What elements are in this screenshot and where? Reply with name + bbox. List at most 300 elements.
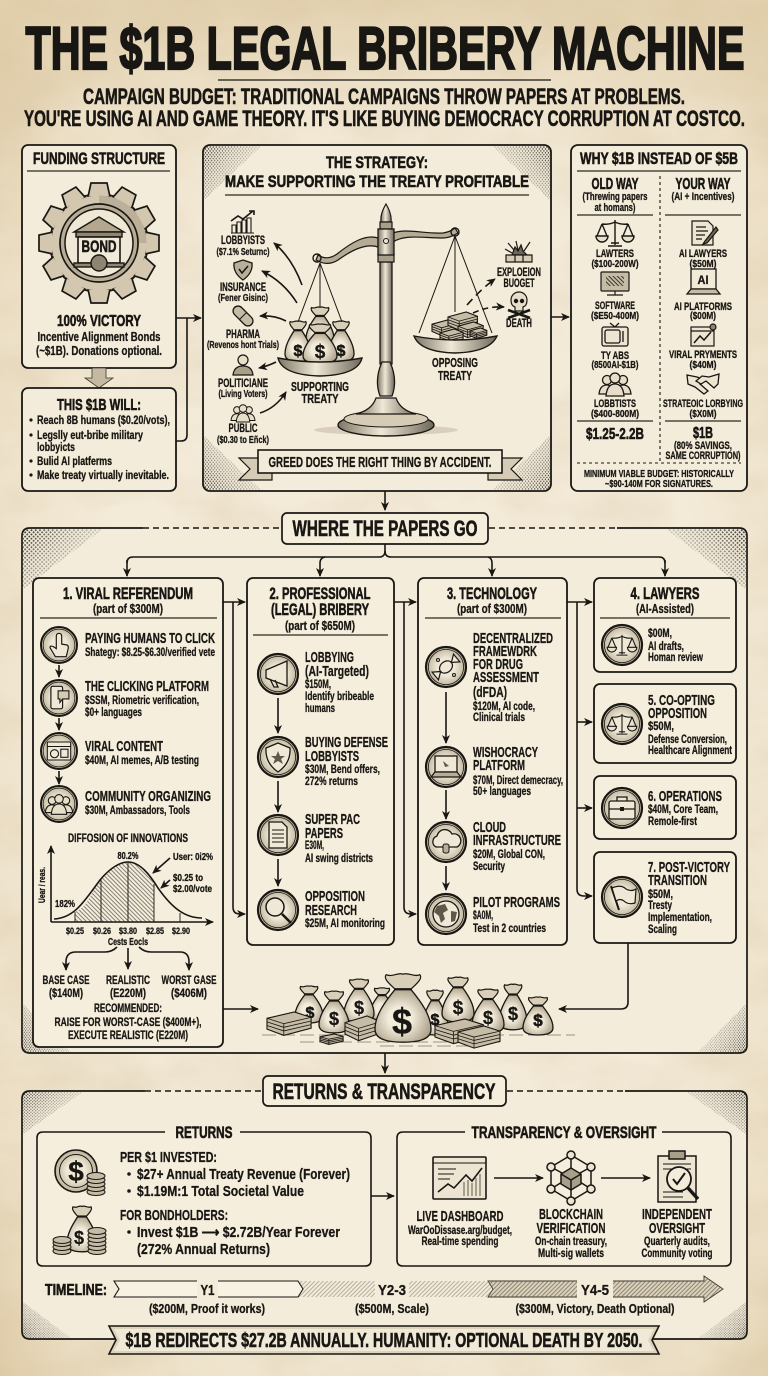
item: lobbying: (AI-Targeted)	[305, 664, 369, 680]
panel: 7 post-victory transition: Scaling	[648, 922, 677, 936]
panel: 6 operations: $40M, Core Team,	[648, 802, 718, 816]
label: live dashboard	[408, 1209, 512, 1248]
timeline: Y4-5	[581, 1282, 609, 1299]
text: for bondholders	[120, 1208, 340, 1258]
panel: 7 post-victory transition: 7. POST-VICTORY	[648, 860, 730, 876]
illustration: money pile: $	[508, 1004, 518, 1024]
heading: returns: RETURNS	[176, 1123, 232, 1142]
text: victory	[36, 313, 162, 358]
panel: 5 co-opting opposition: 5. CO-OPTING	[648, 693, 715, 709]
panel: 7 post-victory transition: Implementation,	[648, 910, 712, 924]
item: pilot programs: PILOT PROGRAMS	[473, 895, 560, 911]
label: pharma: PHARMA	[226, 329, 260, 341]
icon: pointer hand	[41, 627, 77, 663]
item: super pac	[305, 812, 373, 865]
icon: globe	[426, 894, 466, 934]
heading: strategy	[225, 153, 529, 195]
arrow: strategy to where the papers go	[384, 491, 386, 510]
item: dfda: (dFDA)	[473, 685, 507, 701]
illustration: money pile: $	[329, 1009, 339, 1029]
icon: megaphone	[258, 654, 298, 694]
label: explosion budget: BUOGET	[504, 276, 535, 290]
text: per $1 invested: $1.19M:1 Total Societal Value	[137, 1183, 304, 1200]
arrows: into money pile	[223, 943, 628, 1009]
column: old way: OLD WAY	[592, 176, 639, 193]
panel: the strategy	[203, 145, 551, 491]
label: lobbyists: ($7.1% Seturnc)	[216, 247, 270, 258]
icon: bags on supporting pan	[278, 307, 362, 376]
item: wishocracy: PLATFORM	[473, 758, 525, 774]
label: blockchain verification: VERIFICATION	[536, 1221, 606, 1237]
scenarios: ($406M)	[171, 986, 207, 1000]
scenarios: ($140M)	[49, 986, 83, 1000]
icon: shield	[258, 737, 298, 777]
item: super pac: E30M,	[305, 838, 324, 852]
arrow: column 3 to side boxes	[567, 602, 592, 896]
arrow: returns to transparency	[371, 1195, 394, 1197]
chart: diffusion of innovations	[37, 833, 213, 948]
icon: AI laptop: AI	[698, 273, 708, 287]
panel: 3 technology	[418, 578, 567, 945]
panel: 4 lawyers: AI drafts,	[648, 639, 684, 653]
text: victory: (~$1B). Donations optional.	[36, 343, 162, 358]
icon: clipboard audit	[658, 1151, 698, 1202]
item: community organizing: COMMUNITY ORGANIZING	[85, 789, 211, 805]
item: buying defense lobbyists	[305, 735, 388, 788]
heading: (LEGAL) BRIBERY	[271, 600, 369, 619]
panel: 4 lawyers: 4. LAWYERS	[630, 584, 700, 603]
label: independent oversight: INDEPENDENT	[642, 1207, 712, 1223]
illustration: money pile: $	[306, 1005, 315, 1022]
heading: 3. TECHNOLOGY	[447, 584, 537, 603]
column: old way: ($400-800M)	[591, 408, 639, 420]
text: for bondholders: FOR BONDHOLDERS:	[120, 1208, 228, 1224]
icon: dashboard	[433, 1157, 486, 1199]
item: clicking platform: $0+ languages	[85, 705, 142, 719]
icon: gear bond	[39, 183, 159, 303]
item: dfda: Clinical trials	[473, 710, 525, 724]
arrows: branch to columns	[127, 544, 665, 576]
recommendation	[54, 1001, 202, 1042]
item: dfda: FOR DRUG	[473, 657, 523, 673]
item: wishocracy: $70M, Direct demecracy,	[473, 773, 563, 787]
icon: cloud	[426, 822, 466, 862]
icon: flag	[602, 877, 642, 917]
label: pharma: (Revenos hont Trials)	[207, 340, 279, 351]
chart: diffusion of innovations: 80.2%	[118, 851, 139, 862]
scenarios	[42, 973, 216, 1000]
heading: strategy: THE STRATEGY:	[326, 153, 428, 172]
timeline	[45, 1276, 723, 1316]
item: lobbying: LOBBYING	[305, 650, 354, 666]
item: paying humans: PAYING HUMANS TO CLICK	[85, 631, 215, 647]
panel: 4 lawyers: (AI-Assisted)	[636, 601, 694, 616]
bullet list: lobbyicts	[37, 440, 75, 454]
icon: money bag and coins	[53, 1206, 106, 1254]
arrow: strategy to why	[551, 316, 569, 318]
column: your way: ($50M)	[690, 258, 716, 270]
column: old way: $1.25-2.2B	[586, 426, 644, 443]
item: lobbying: $150M,	[305, 677, 331, 691]
icon: coin and stack: $	[68, 1156, 84, 1187]
bullet list: Make treaty virtually inevitable.	[37, 468, 169, 482]
label: death: DEATH	[506, 316, 532, 330]
icon: candy	[426, 647, 466, 687]
item: buying defense lobbyists: $30M, Bend offers,	[305, 762, 380, 776]
item: super pac: PAPERS	[305, 826, 343, 842]
panel: 7 post-victory transition: Tresty	[648, 898, 672, 912]
arrows: item flow	[58, 665, 60, 784]
banner: greed	[239, 450, 522, 480]
item: viral content	[85, 739, 199, 767]
illustration: money pile: $	[431, 1012, 440, 1029]
heading: where the papers go	[282, 513, 488, 544]
scenarios: BASE CASE	[42, 973, 90, 987]
icon: scales	[602, 704, 642, 744]
panel: 6 operations: 6. OPERATIONS	[648, 789, 722, 805]
item: pilot programs: $A0M,	[473, 908, 493, 922]
item: cloud infrastructure: INFRASTRUCTURE	[473, 833, 561, 849]
item: wishocracy	[473, 745, 563, 798]
item: community organizing	[85, 789, 211, 817]
panel: 5 co-opting opposition: OPPOSITION	[648, 706, 707, 722]
banner: greed: GREED DOES THE RIGHT THING BY ACCIDENT.	[268, 454, 492, 471]
panel: 7 post-victory transition: $50M,	[648, 887, 673, 901]
panel: 6 operations: Remole-first	[648, 814, 697, 828]
item: pilot programs	[473, 895, 560, 935]
icon: scales	[602, 625, 642, 665]
illustration: money pile: $	[533, 1011, 543, 1030]
recommendation: EXECUTE REALISTIC (E220M)	[68, 1028, 188, 1042]
scenarios: REALISTIC	[106, 973, 150, 987]
label: opposing treaty	[432, 356, 478, 383]
label: public	[217, 423, 269, 446]
panel: 5 co-opting opposition: Defense Conversion,	[648, 732, 727, 746]
note: minimum viable budget: ~$90-140M FOR SIGNATURES.	[605, 478, 713, 490]
heading	[40, 584, 217, 618]
panel: 5 co-opting opposition: Healthcare Alignment	[648, 743, 732, 757]
icon: pharma pill	[231, 304, 255, 328]
icon: cash on opposing pan	[414, 312, 497, 353]
timeline: ($500M, Scale)	[355, 1301, 429, 1316]
column: your way: VIRAL PRYMENTS	[669, 349, 737, 361]
chart: diffusion of innovations: $3.80	[119, 926, 137, 937]
item: opposition research: $25M, AI monitoring	[305, 916, 385, 930]
column: old way: (Threwing papers	[582, 191, 648, 203]
item: cloud infrastructure	[473, 820, 561, 873]
panel: 7 post-victory transition	[594, 852, 736, 943]
illustration: money pile: $	[483, 1008, 493, 1028]
item: dfda: ASSESSMENT	[473, 670, 539, 686]
item: viral content: $40M, AI memes, A/B testing	[85, 753, 199, 767]
label: live dashboard: WarOoDissase.arg/budget,	[408, 1223, 512, 1237]
icon: skull	[508, 292, 530, 318]
column: your way: $1B	[693, 425, 713, 442]
timeline: Y2-3	[378, 1282, 406, 1299]
label: blockchain verification	[535, 1207, 607, 1260]
panel: where the papers go	[22, 513, 747, 1053]
chart: diffusion of innovations: DIFFOSION OF INNOVATIONS	[68, 833, 188, 845]
column: old way: LAWTERS	[596, 248, 634, 260]
text: victory: 100% VICTORY	[57, 313, 141, 330]
item: clicking platform: THE CLICKING PLATFORM	[85, 679, 209, 695]
text: per $1 invested	[120, 1150, 350, 1200]
item: wishocracy: 50+ languages	[473, 784, 531, 798]
column: your way: AI LAWYERS	[679, 248, 727, 260]
label: lobbyists	[216, 235, 270, 258]
label: politicians	[218, 378, 268, 400]
item: dfda	[473, 631, 553, 724]
icon: explosion budget	[505, 241, 532, 262]
chart: diffusion of innovations: $2.85	[146, 926, 165, 937]
panel: returns	[37, 1123, 371, 1266]
chart: diffusion of innovations: User: 0i2%	[173, 852, 213, 863]
item: cloud infrastructure: Security	[473, 859, 505, 873]
panel: transparency and oversight	[397, 1123, 731, 1266]
label: live dashboard: LIVE DASHBOARD	[416, 1209, 504, 1225]
subtitle	[24, 80, 745, 131]
icon: insurance shield	[234, 260, 252, 280]
column: your way: (AI + Incentives)	[672, 191, 735, 203]
label: insurance: INSURANCE	[220, 282, 266, 294]
column: old way: (8500AI-$1B)	[592, 359, 638, 371]
panel: 1 viral referendum	[33, 578, 223, 1047]
label: pharma	[207, 329, 279, 351]
arrow: money to returns	[384, 1053, 386, 1073]
panel: 6 operations	[594, 776, 736, 839]
recommendation: RAISE FOR WORST-CASE ($400M+),	[54, 1015, 202, 1029]
icon: viral chart	[691, 324, 716, 346]
icon: money bag and coins: $	[74, 1228, 84, 1248]
icon: bags on supporting pan: $	[337, 343, 346, 360]
icon: handshake	[687, 374, 719, 394]
icon: public	[231, 405, 255, 422]
item: super pac: AI swing districts	[305, 851, 373, 865]
icon: monitor	[601, 272, 629, 295]
column: old way: ($100-200W)	[592, 258, 638, 270]
column: old way: at homans)	[594, 202, 636, 214]
note: minimum viable budget	[584, 468, 734, 490]
heading: returns and transparency: RETURNS & TRANSPARENCY	[272, 1079, 496, 1104]
label: insurance: (Fener Gisinc)	[218, 293, 268, 304]
item: buying defense lobbyists: LOBBYISTS	[305, 749, 359, 765]
column: your way: ($00M)	[690, 310, 716, 322]
scenarios: (E220M)	[110, 986, 146, 1000]
column: old way	[577, 176, 653, 443]
label: politicians: (Living Voters)	[218, 389, 268, 400]
arrow: column 2 to column 3	[394, 602, 416, 914]
icon: politician	[233, 355, 253, 375]
label: live dashboard: Real-time spending	[422, 1234, 498, 1248]
label: blockchain verification: On-chain treasury,	[535, 1234, 607, 1248]
label: explosion budget: EXPLOEION	[497, 265, 541, 279]
illustration: money pile: $	[392, 1001, 412, 1042]
column: old way: TY ABS	[601, 350, 629, 362]
panel: 5 co-opting opposition	[594, 684, 736, 763]
heading: 1. VIRAL REFERENDUM	[63, 584, 193, 603]
label: insurance	[218, 282, 268, 304]
item: paying humans	[85, 631, 215, 659]
icon: briefcase	[602, 788, 642, 828]
chart: diffusion of innovations: 182%	[55, 899, 75, 910]
label: independent oversight: Quarterly audits,	[644, 1234, 710, 1248]
bullet list: Reach 8B humans ($0.20/vots),	[37, 413, 170, 427]
label: blockchain verification: Multi-sig wallets	[538, 1246, 604, 1260]
icon: tv	[602, 323, 628, 346]
heading	[425, 584, 561, 618]
panel: 2 professional bribery	[247, 578, 394, 945]
heading: (part of $300M)	[93, 601, 163, 616]
bullet list	[29, 413, 170, 482]
timeline: TIMELINE:	[45, 1282, 107, 1299]
text: per $1 invested: PER $1 INVESTED:	[120, 1150, 217, 1166]
item: cloud infrastructure: CLOUD	[473, 820, 506, 836]
label: independent oversight: Community voting	[642, 1246, 712, 1260]
label: supporting treaty: SUPPORTING	[291, 380, 349, 394]
label: opposing treaty: OPPOSING	[432, 356, 478, 370]
heading: returns and transparency	[263, 1076, 506, 1106]
column: your way: YOUR WAY	[676, 176, 731, 193]
panel: 4 lawyers: Homan review	[648, 650, 703, 664]
arrows: oversight flow	[494, 1177, 650, 1179]
panel: why $1B instead of $5B	[571, 145, 747, 491]
icon: magnifier	[258, 890, 298, 930]
icon: coin and stack	[55, 1150, 105, 1196]
item: buying defense lobbyists: 272% returns	[305, 774, 358, 788]
chart: diffusion of innovations: $0.25	[66, 926, 85, 937]
icon: scales	[596, 220, 634, 246]
column: old way: LOBBTISTS	[594, 398, 636, 410]
heading: (part of $300M)	[457, 601, 527, 616]
column: your way: ($X0M)	[690, 408, 716, 420]
icon: bags on supporting pan: $	[294, 343, 303, 360]
panel: 4 lawyers	[594, 578, 736, 672]
arrow: column 1 to column 2	[223, 602, 245, 914]
panel: 5 co-opting opposition: $50M,	[648, 719, 674, 733]
timeline: ($200M, Proof it works)	[149, 1301, 265, 1316]
item: opposition research	[305, 889, 385, 930]
heading	[253, 584, 388, 635]
illustration: money pile: $	[354, 998, 364, 1018]
column: old way: SOFTWARE	[595, 300, 635, 312]
bullet list: Legslly eut-bribe military	[37, 428, 143, 442]
icon: video window	[41, 733, 77, 769]
panel: this $1B will	[22, 388, 176, 491]
arrows: opposing outcomes	[467, 279, 504, 313]
text: for bondholders: Invest $1B ⟶ $2.72B/Year Forever	[137, 1224, 340, 1241]
label: supporting treaty	[291, 380, 349, 406]
item: opposition research: OPPOSITION	[305, 889, 365, 905]
arrow: funding to strategy	[176, 318, 201, 441]
icon: phone	[41, 680, 77, 716]
icon: gear bond: BOND	[82, 237, 116, 256]
column: old way: ($E50-400M)	[591, 310, 639, 322]
heading: strategy: MAKE SUPPORTING THE TREATY PROFITABLE	[225, 172, 529, 191]
arrows: item flow	[445, 692, 447, 890]
item: community organizing: $30M, Ambassadors, Tools	[85, 803, 190, 817]
chart: diffusion of innovations: $0.25 to	[173, 873, 203, 884]
item: clicking platform: $SSM, Riometric verification,	[85, 693, 199, 707]
chart: diffusion of innovations: Uear / reas.	[37, 867, 47, 903]
icon: lobbyists chart	[231, 211, 254, 233]
illustration: money pile: $	[453, 998, 464, 1019]
label: supporting treaty: TREATY	[302, 392, 339, 406]
heading: (part of $650M)	[285, 618, 355, 633]
item: dfda: FRAMEWDRK	[473, 644, 537, 660]
scale illustration	[278, 204, 497, 436]
item: clicking platform	[85, 679, 209, 719]
icon: document pen	[692, 221, 718, 245]
item: lobbying: humans	[305, 701, 335, 715]
arrow: funding down	[85, 368, 113, 388]
chart: diffusion of innovations: $2.90	[172, 926, 190, 937]
heading: funding structure: FUNDING STRUCTURE	[33, 149, 165, 168]
scenarios: WORST GASE	[162, 973, 216, 987]
item: pilot programs: Test in 2 countries	[473, 921, 546, 935]
icon: laptop	[426, 747, 466, 787]
item: super pac: SUPER PAC	[305, 812, 360, 828]
icon: AI laptop	[687, 269, 720, 294]
arrows: beneficiaries	[259, 243, 302, 413]
item: lobbying: Identify bribeable	[305, 689, 374, 703]
bullet list: Bulid AI platferms	[37, 454, 112, 468]
panel: 4 lawyers: $00M,	[648, 626, 672, 640]
text: victory: Incentive Alignment Bonds	[38, 329, 160, 344]
timeline: ($300M, Victory, Death Optional)	[516, 1301, 674, 1316]
label: public: PUBLIC	[228, 423, 258, 435]
arrows: scenarios	[66, 947, 189, 970]
panel: 7 post-victory transition: TRANSITION	[648, 873, 707, 889]
icon: blockchain	[547, 1151, 595, 1205]
icon: community	[41, 786, 77, 822]
item: wishocracy: WISHOCRACY	[473, 745, 538, 761]
label: lobbyists: LOBBYISTS	[221, 235, 265, 247]
item: cloud infrastructure: $20M, Global CON,	[473, 847, 545, 861]
heading: this $1B will: THIS $1B WILL:	[57, 397, 141, 414]
text: per $1 invested: $27+ Annual Treaty Revenue (Forever)	[137, 1166, 350, 1183]
label: explosion budget	[497, 265, 541, 290]
label: independent oversight: OVERSIGHT	[649, 1221, 705, 1237]
text: for bondholders: (272% Annual Returns)	[137, 1241, 270, 1258]
heading: where the papers go: WHERE THE PAPERS GO	[292, 516, 478, 541]
icon: bags on supporting pan: $	[315, 342, 326, 363]
label: politicians: POLITICIANE	[218, 378, 268, 390]
recommendation: RECOMMENDED:	[94, 1001, 162, 1015]
item: lobbying	[305, 650, 374, 715]
column: your way: (80% SAVINGS,	[674, 440, 732, 452]
item: paying humans: Shategy: $8.25-$6.30/verified vete	[85, 645, 215, 659]
chart: diffusion of innovations: $0.26	[93, 926, 111, 937]
icon: document	[258, 815, 298, 855]
item: opposition research: RESEARCH	[305, 903, 357, 919]
illustration: money pile	[262, 974, 575, 1048]
icon: lobbyists	[599, 373, 631, 396]
heading: 2. PROFESSIONAL	[270, 584, 370, 603]
item: viral content: VIRAL CONTENT	[85, 739, 163, 755]
column: your way: AI PLATFORMS	[674, 301, 732, 313]
item: dfda: DECENTRALIZED	[473, 631, 553, 647]
panel: returns and transparency	[22, 1076, 747, 1354]
label: independent oversight	[642, 1207, 712, 1260]
label: public: ($0.30 to Eñck)	[217, 435, 269, 446]
item: dfda: $120M, AI code,	[473, 699, 535, 713]
timeline: Y1	[200, 1282, 214, 1299]
chart: diffusion of innovations: Cests Eocls	[108, 937, 148, 948]
heading: transparency: TRANSPARENCY & OVERSIGHT	[472, 1123, 657, 1142]
label: blockchain verification: BLOCKCHAIN	[539, 1207, 603, 1223]
label: opposing treaty: TREATY	[438, 369, 472, 383]
arrows: item flow	[277, 698, 279, 886]
